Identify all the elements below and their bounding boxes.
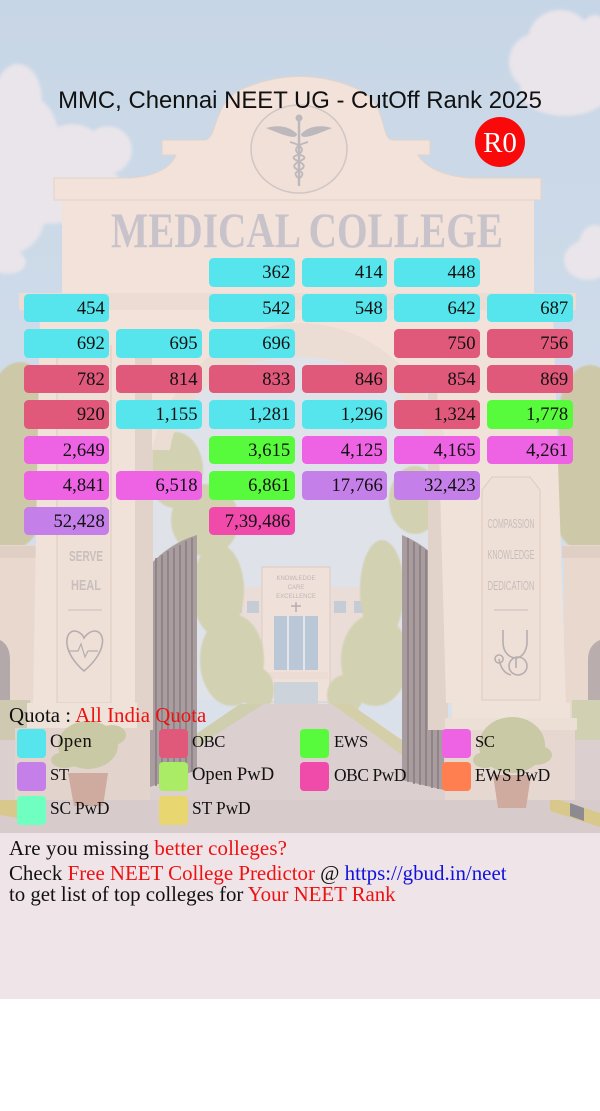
rank 1,778 EWS	[487, 400, 573, 429]
main arch wall with opening	[40, 195, 553, 450]
rank 52,428 ST	[24, 507, 109, 535]
rank 32,423 ST: 32,423	[424, 475, 476, 496]
rank 846 OBC	[302, 365, 387, 393]
rank 1,296 Open	[302, 400, 387, 429]
rank 6,861 EWS: 6,861	[248, 475, 290, 496]
legend label: ST PwD: ST PwD	[192, 798, 251, 818]
title: MMC, Chennai NEET UG - CutOff Rank 2025	[58, 87, 542, 114]
legend label: SC: SC	[475, 732, 494, 751]
rank 17,766 ST	[302, 471, 387, 500]
rank 695 Open: 695	[170, 333, 198, 354]
rank 4,841 SC: 4,841	[63, 475, 105, 496]
rank 1,155 Open: 1,155	[155, 404, 198, 425]
rank 542 Open	[209, 294, 295, 322]
rank 4,125 SC: 4,125	[341, 440, 383, 461]
rank 920 OBC: 920	[77, 404, 105, 425]
rank 454 Open	[24, 294, 109, 322]
rank 2,649 SC: 2,649	[63, 440, 105, 461]
rank 1,778 EWS: 1,778	[526, 404, 568, 425]
rank 756 OBC	[487, 329, 573, 358]
rank 687 Open	[487, 294, 573, 322]
rank 448 Open: 448	[448, 262, 476, 283]
inner building: KNOWLEDGE	[276, 576, 316, 582]
rank 3,615 EWS: 3,615	[248, 440, 290, 461]
legend label: ST: ST	[50, 765, 69, 784]
rank 32,423 ST	[394, 471, 480, 500]
rank 6,518 SC	[116, 471, 202, 500]
opening sky fill	[140, 340, 440, 700]
rank 1,296 Open: 1,296	[341, 404, 383, 425]
potted plants	[51, 717, 552, 808]
rank 4,841 SC	[24, 471, 109, 500]
rank 756 OBC: 756	[540, 333, 568, 354]
legend swatch: SC PwD	[16, 796, 46, 825]
rank 854 OBC	[394, 365, 480, 393]
rank 692 Open	[24, 329, 109, 358]
rank 4,261 SC: 4,261	[526, 440, 568, 461]
rank 687 Open: 687	[540, 298, 568, 319]
cutoff rank grid	[24, 258, 573, 535]
round badge: R0: R0	[483, 126, 517, 158]
campus trees	[147, 432, 441, 715]
rank 548 Open: 548	[355, 298, 383, 319]
rank 1,281 Open: 1,281	[248, 404, 290, 425]
ground and road	[0, 740, 600, 833]
legend swatch: OBC	[158, 729, 188, 758]
legend	[17, 729, 550, 825]
rank 414 Open	[302, 258, 387, 287]
left pillar: HEAL	[71, 577, 101, 594]
rank 454 Open: 454	[77, 298, 105, 319]
rank 833 OBC	[209, 365, 295, 393]
left pillar: SERVE	[69, 548, 103, 565]
rank 750 OBC	[394, 329, 480, 358]
rank 542 Open: 542	[262, 298, 290, 319]
legend swatch: OBC PwD	[300, 762, 329, 791]
rank 7,39,486 OBC PwD: 7,39,486	[225, 511, 290, 532]
rank 548 Open	[302, 294, 387, 322]
inner building	[222, 567, 380, 704]
inner building: EXCELLENCE	[276, 594, 316, 600]
right pillar	[428, 310, 577, 800]
right pillar: DEDICATION	[488, 578, 534, 593]
inner building: CARE	[288, 585, 304, 591]
rank 2,649 SC	[24, 436, 109, 464]
rank 1,281 Open	[209, 400, 295, 429]
rank 4,165 SC: 4,165	[433, 440, 476, 461]
rank 3,615 EWS	[209, 436, 295, 464]
rank 920 OBC	[24, 400, 109, 429]
legend swatch: SC	[442, 729, 471, 758]
rank 6,518 SC: 6,518	[155, 475, 198, 496]
rank 696 Open	[209, 329, 295, 358]
right pillar: KNOWLEDGE	[488, 547, 535, 562]
rank 17,766 ST: 17,766	[331, 475, 383, 496]
promo line 3: to get list of top colleges for Your NEET Rank	[9, 882, 396, 906]
pediment and medallion	[54, 76, 541, 200]
left pillar	[15, 310, 153, 800]
rank 362 Open: 362	[262, 262, 290, 283]
background illustration: medical college gate	[0, 0, 600, 833]
rank 846 OBC: 846	[355, 369, 383, 390]
legend swatch: ST	[16, 762, 46, 791]
rank 6,861 EWS	[209, 471, 295, 500]
legend swatch: Open	[16, 729, 46, 758]
rank 854 OBC: 854	[448, 369, 476, 390]
rank 414 Open: 414	[355, 262, 383, 283]
rank 869 OBC	[487, 365, 573, 393]
rank 696 Open: 696	[262, 333, 290, 354]
legend label: EWS PwD: EWS PwD	[475, 765, 550, 785]
rank 1,324 OBC: 1,324	[433, 404, 476, 425]
rank 1,324 OBC	[394, 400, 480, 429]
promo line 2: Check Free NEET College Predictor @ https://gbud.in/neet	[9, 861, 507, 885]
legend label: EWS: EWS	[334, 732, 368, 751]
right pillar: COMPASSION	[488, 516, 534, 531]
rank 782 OBC: 782	[77, 369, 105, 390]
rank 52,428 ST: 52,428	[53, 511, 105, 532]
clouds	[0, 10, 600, 280]
engraved college name: MEDICAL COLLEGE	[111, 202, 503, 258]
side walls	[0, 545, 600, 800]
legend label: Open: Open	[50, 731, 92, 752]
legend label: SC PwD: SC PwD	[50, 798, 109, 818]
legend swatch: EWS PwD	[442, 762, 471, 791]
legend swatch: EWS	[300, 729, 329, 758]
rank 642 Open: 642	[448, 298, 476, 319]
gate leaves	[150, 535, 444, 790]
rank 833 OBC: 833	[262, 369, 290, 390]
rank 692 Open: 692	[77, 333, 105, 354]
legend swatch: ST PwD	[158, 796, 188, 825]
legend label: OBC: OBC	[192, 732, 225, 751]
rank 4,125 SC	[302, 436, 387, 464]
rank 750 OBC: 750	[448, 333, 476, 354]
rank 869 OBC: 869	[540, 369, 568, 390]
rank 4,165 SC	[394, 436, 480, 464]
rank 695 Open	[116, 329, 202, 358]
rank 448 Open	[394, 258, 480, 287]
legend label: Open PwD: Open PwD	[192, 764, 274, 785]
promo line 1: Are you missing better colleges?	[9, 836, 287, 860]
curbs	[0, 797, 600, 827]
rank 1,155 Open	[116, 400, 202, 429]
rank 4,261 SC	[487, 436, 573, 464]
legend swatch: Open PwD	[158, 762, 188, 791]
legend label: OBC PwD: OBC PwD	[334, 765, 406, 785]
promo panel	[0, 833, 600, 999]
round badge: R0	[475, 116, 525, 166]
rank 814 OBC: 814	[170, 369, 198, 390]
rank 7,39,486 OBC PwD	[209, 507, 295, 535]
outer trees	[0, 362, 600, 552]
quota line: Quota : All India Quota	[9, 703, 206, 727]
rank 782 OBC	[24, 365, 109, 393]
rank 642 Open	[394, 294, 480, 322]
rank 814 OBC	[116, 365, 202, 393]
rank 362 Open	[209, 258, 295, 287]
